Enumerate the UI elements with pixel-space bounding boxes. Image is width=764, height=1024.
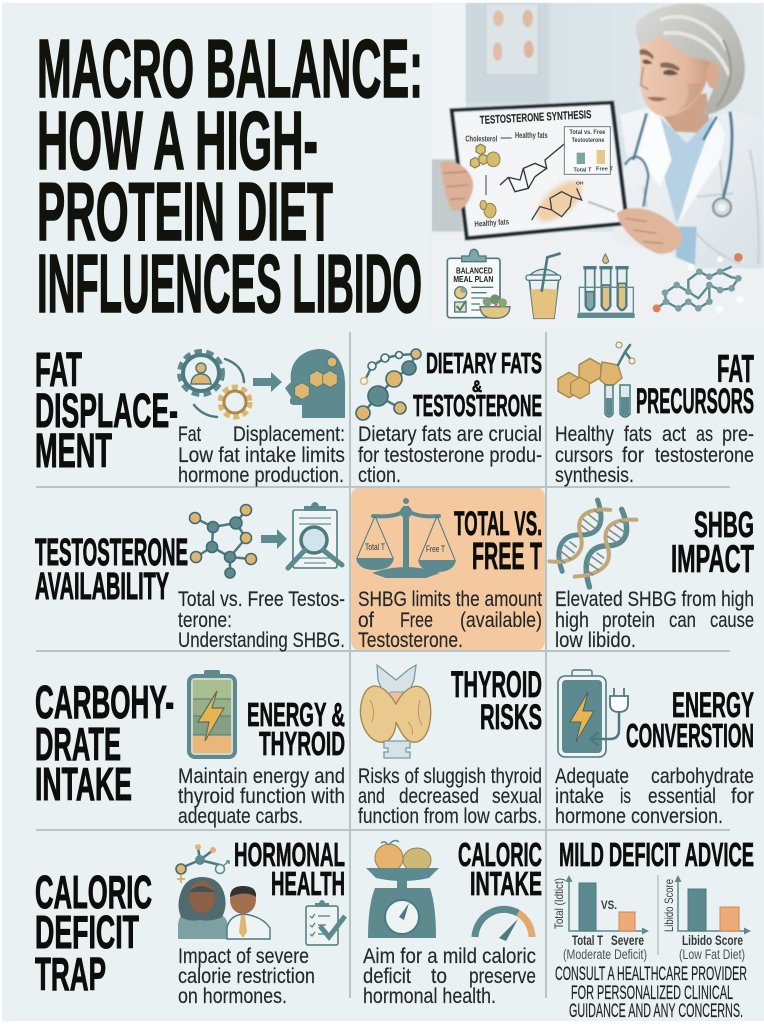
text: as xyxy=(696,423,713,446)
chart: total T moderate vs severe deficit: (Moderate Deficit) xyxy=(563,947,647,962)
heading xyxy=(636,348,754,421)
text: is xyxy=(620,785,631,808)
text xyxy=(178,765,345,828)
tablet diagram content: Healthy fats xyxy=(515,131,548,140)
hero photo: clinician presenting a tablet xyxy=(432,3,763,328)
chart: total T moderate vs severe deficit: VS. xyxy=(601,898,617,912)
icon: balance scale xyxy=(356,498,456,578)
heading xyxy=(458,836,542,902)
text: intake xyxy=(555,785,604,808)
highlighted panel background: Total vs. Free T xyxy=(351,487,545,651)
heading xyxy=(626,686,754,754)
heading xyxy=(454,505,542,578)
text: Adequate xyxy=(555,765,629,788)
icon: shake cup xyxy=(526,253,561,318)
text: for xyxy=(731,785,754,808)
tablet diagram content: Free T xyxy=(596,167,614,173)
text: Understanding SHBG. xyxy=(178,629,345,652)
text: pre- xyxy=(722,423,754,446)
chart: total T moderate vs severe deficit xyxy=(552,875,649,962)
text: preserve xyxy=(469,965,536,988)
text: hormone production. xyxy=(178,464,344,487)
icon: battery xyxy=(189,670,235,757)
text xyxy=(358,423,542,487)
text: cursors xyxy=(555,444,613,467)
text: Free xyxy=(400,609,433,632)
text: for testosterone produ- xyxy=(358,444,542,467)
icon: gears and head xyxy=(181,349,345,418)
text: act xyxy=(662,423,686,446)
icon: calorie gauge xyxy=(475,909,532,941)
row 1 heading: fat displacement xyxy=(35,344,178,478)
panel: energy conversion xyxy=(555,670,754,828)
text: and xyxy=(358,785,385,808)
chart: total T moderate vs severe deficit: Severe xyxy=(611,933,644,948)
heading xyxy=(413,348,542,423)
chart: total T moderate vs severe deficit: Total T xyxy=(572,933,604,948)
text: Impact of severe xyxy=(178,945,309,968)
text: hormonal health. xyxy=(363,985,496,1008)
text: fats xyxy=(624,423,652,446)
panel: dietary fats and testosterone xyxy=(356,348,542,487)
heading: HEALTH xyxy=(271,865,345,902)
row 3 heading: carbohydrate intake: CARBOHY- xyxy=(35,676,174,728)
text: Aim for a mild caloric xyxy=(363,945,536,968)
heading: TOTAL VS. xyxy=(454,505,542,543)
panel: testosterone availability xyxy=(178,502,345,652)
heading: ENERGY & xyxy=(247,696,345,733)
text: function from low carbs. xyxy=(358,805,542,828)
text: sexual xyxy=(492,785,542,808)
callout: consult a healthcare provider xyxy=(555,964,747,1022)
panel: thyroid risks xyxy=(358,664,542,828)
tablet diagram content: Testosterone xyxy=(572,137,605,144)
tablet diagram content: Total vs. Free xyxy=(569,129,606,136)
text xyxy=(555,423,754,487)
row 1 heading: fat displacement: DISPLACE- xyxy=(35,385,178,438)
text: deficit xyxy=(363,965,411,988)
row 3 heading: carbohydrate intake xyxy=(35,676,174,810)
infographic page: TESTOSTERONE xyxy=(35,532,188,574)
heading: HORMONAL xyxy=(234,836,345,873)
text xyxy=(555,588,754,652)
text xyxy=(363,945,536,1008)
panel: total vs. free T (highlighted) xyxy=(356,498,542,652)
text: protein xyxy=(602,609,655,632)
icon: DNA helices xyxy=(548,499,637,587)
row 2 heading: testosterone availability: AVAILABILITY xyxy=(35,566,169,608)
panel: caloric intake xyxy=(363,836,542,1008)
text xyxy=(178,945,315,1008)
row 4 heading: caloric deficit trap xyxy=(35,866,152,1000)
text: on hormones. xyxy=(178,985,287,1008)
text xyxy=(555,765,754,828)
row 3 heading: carbohydrate intake: INTAKE xyxy=(35,758,132,810)
text: can xyxy=(669,609,696,632)
text: hormone conversion. xyxy=(555,805,723,828)
text: Risks of sluggish thyroid xyxy=(358,765,542,788)
heading: FREE T xyxy=(472,536,542,578)
icon: balanced meal plan clipboard xyxy=(447,249,510,318)
heading xyxy=(451,664,542,737)
panel: energy and thyroid xyxy=(178,670,345,828)
text: Total vs. Free Testos- xyxy=(178,588,345,611)
text xyxy=(178,423,345,487)
tablet diagram content: Total T xyxy=(573,168,592,174)
text: (available) xyxy=(460,609,542,632)
row 1 heading: fat displacement: FAT xyxy=(35,344,82,397)
text xyxy=(178,588,345,652)
panel: fat displacement xyxy=(178,349,345,487)
tablet diagram content: Healthy fats xyxy=(474,217,510,229)
text: Testosterone. xyxy=(358,629,463,652)
heading: & xyxy=(472,377,482,396)
text: low libido. xyxy=(555,629,636,652)
icon: balance scale: Total T xyxy=(365,542,385,552)
panel: fat precursors xyxy=(555,342,754,487)
text: thyroid function with xyxy=(178,785,345,808)
title xyxy=(37,22,423,330)
text: high xyxy=(555,609,589,632)
text: decreased xyxy=(399,785,479,808)
heading xyxy=(234,836,345,902)
heading xyxy=(671,504,754,581)
text: of xyxy=(358,609,374,632)
heading: INTAKE xyxy=(470,865,542,902)
text: essential xyxy=(648,785,716,808)
text: synthesis. xyxy=(555,464,634,487)
tablet diagram content: OH xyxy=(576,180,584,186)
text xyxy=(358,765,542,828)
panel: SHBG impact xyxy=(548,499,754,652)
icon: kitchen scale with fruit xyxy=(366,841,439,938)
tablet diagram content xyxy=(465,108,614,229)
text: to xyxy=(431,965,447,988)
icon: test tubes xyxy=(577,254,635,318)
heading xyxy=(247,696,345,762)
heading: DIETARY FATS xyxy=(426,348,542,380)
tablet diagram content: TESTOSTERONE SYNTHESIS xyxy=(479,108,592,127)
row 4 heading: caloric deficit trap: DEFICIT xyxy=(35,906,139,958)
heading: RISKS xyxy=(480,698,542,737)
chart: total T moderate vs severe deficit: Total (Idtict) xyxy=(552,878,566,929)
panel: hormonal health xyxy=(176,836,345,1008)
panel: mild deficit advice xyxy=(552,836,754,1022)
heading: THYROID xyxy=(259,725,345,762)
grid lines xyxy=(36,332,730,998)
text: Dietary fats are crucial xyxy=(358,423,542,446)
tablet diagram content: Cholesterol xyxy=(465,134,497,143)
row 1 heading: fat displacement: MENT xyxy=(35,425,112,478)
icon: steroid and test tubes xyxy=(558,342,635,417)
row 3 heading: carbohydrate intake: DRATE xyxy=(35,718,121,770)
icon: balanced meal plan clipboard: MEAL PLAN xyxy=(453,274,493,284)
icon: molecule, arrow and magnifier clipboard xyxy=(190,502,342,578)
text: Healthy xyxy=(555,423,614,446)
text: adequate carbs. xyxy=(178,805,303,828)
title: HOW A HIGH- xyxy=(37,94,318,187)
text: Fat xyxy=(178,423,201,446)
text: Maintain energy and xyxy=(178,765,345,788)
text: calorie restriction xyxy=(178,965,315,988)
icon: patient and doctor with checklist xyxy=(176,844,345,945)
row 4 heading: caloric deficit trap: CALORIC xyxy=(35,866,152,918)
text: SHBG limits the amount xyxy=(358,588,542,611)
icon: thyroid gland xyxy=(360,665,431,758)
text: Displacement: xyxy=(233,423,345,446)
text: terone: xyxy=(178,609,232,632)
heading: CALORIC xyxy=(458,836,542,873)
text: for xyxy=(622,444,644,467)
icon: battery with plug xyxy=(558,670,628,757)
icon: steroid molecule xyxy=(653,253,744,313)
chart: libido score on low fat diet: Libido Score xyxy=(682,933,743,948)
text xyxy=(358,588,542,652)
text: ction. xyxy=(358,464,401,487)
row 4 heading: caloric deficit trap: TRAP xyxy=(35,948,106,1000)
heading: TESTOSTERONE xyxy=(413,388,542,423)
title: PROTEIN DIET xyxy=(37,165,333,258)
row 2 heading: testosterone availability xyxy=(35,532,188,608)
chart: libido score on low fat diet: (Low Fat Diet) xyxy=(679,947,745,962)
text: Low fat intake limits xyxy=(178,444,345,467)
chart: libido score on low fat diet: Libido Score xyxy=(662,879,676,932)
heading: THYROID xyxy=(451,664,542,705)
icon: molecule chain xyxy=(356,349,421,420)
chart: libido score on low fat diet xyxy=(658,875,751,962)
icon: balanced meal plan clipboard: BALANCED xyxy=(456,265,493,275)
icon: balance scale: Free T xyxy=(426,544,445,554)
